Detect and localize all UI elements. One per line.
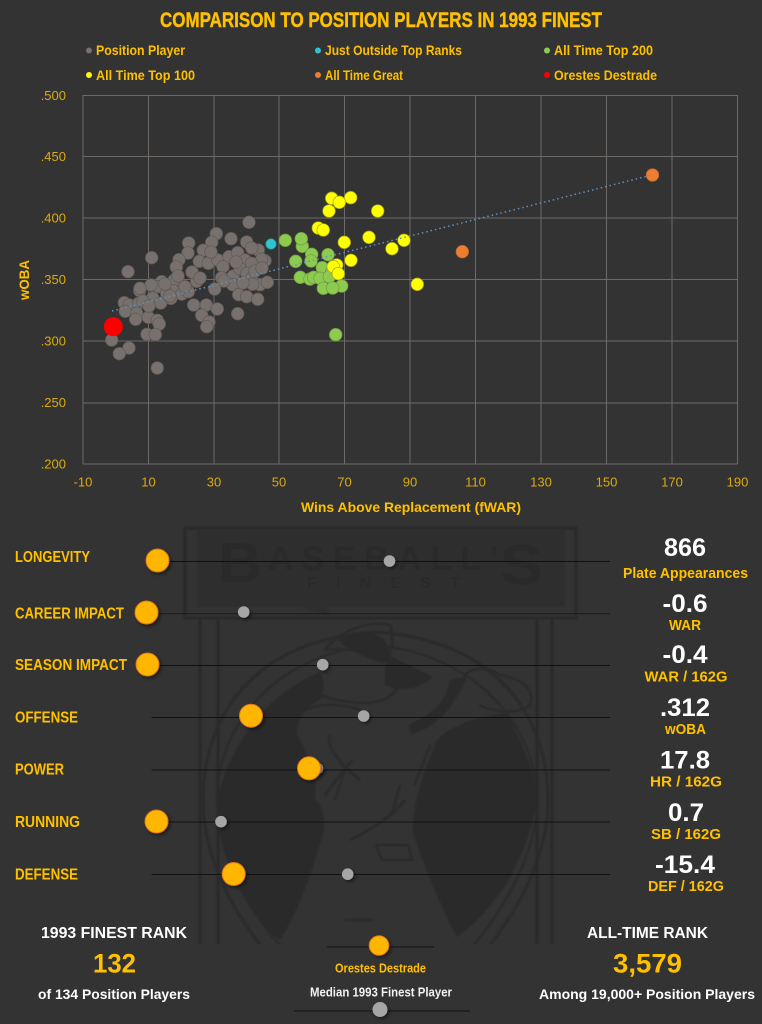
row: defense: DEFENSE — [15, 866, 78, 884]
row: season impact: -0.4 — [662, 641, 708, 669]
dark crescent left — [217, 672, 324, 940]
row: season impact: SEASON IMPACT — [15, 657, 127, 674]
legend item: all time great: All Time Great — [325, 67, 403, 83]
row: offense: OFFENSE — [15, 710, 78, 726]
watermark: Baseball's Finest card logo — [185, 528, 576, 985]
all-time rank: 3,579 — [613, 948, 682, 978]
row: longevity: LONGEVITY — [15, 549, 90, 566]
scatter chart: wOBA vs fWAR — [16, 88, 748, 515]
x axis labels: 190 — [727, 474, 748, 490]
all-time rank: Among 19,000+ Position Players — [539, 986, 755, 1002]
row: running: SB / 162G — [651, 827, 721, 843]
1993 finest rank — [38, 925, 190, 1002]
y axis labels: .300 — [41, 334, 66, 348]
row: defense: -15.4 — [655, 851, 715, 879]
y axis labels — [41, 88, 66, 472]
x axis labels: 50 — [272, 474, 286, 490]
key: median 1993 finest player marker: Median 1993 Finest Player — [310, 984, 452, 1000]
logo lettering — [218, 531, 543, 597]
y axis title: wOBA — [16, 260, 32, 301]
logo lettering: B — [218, 531, 262, 595]
row: season impact — [15, 641, 728, 686]
all-time rank — [539, 925, 755, 1002]
x axis title: Wins Above Replacement (fWAR) — [301, 499, 521, 515]
row: career impact — [15, 590, 708, 634]
x axis labels: 130 — [530, 474, 552, 490]
row: power — [15, 746, 722, 790]
logo lettering: S — [500, 533, 543, 597]
row: running: RUNNING — [15, 814, 80, 831]
red point: Orestes Destrade — [104, 317, 123, 336]
x axis labels: 90 — [403, 474, 417, 490]
row: longevity — [15, 534, 748, 582]
x axis labels: 30 — [207, 474, 221, 490]
green points: all time top 200 — [279, 232, 348, 341]
row: career impact: CAREER IMPACT — [15, 606, 124, 622]
legend item: position player: Position Player — [96, 42, 185, 58]
x axis labels: 170 — [661, 474, 683, 490]
x axis labels — [74, 474, 748, 490]
key: median 1993 finest player marker — [294, 984, 470, 1017]
trend line — [112, 176, 650, 311]
y axis labels: .200 — [41, 456, 66, 472]
y axis labels: .500 — [41, 88, 66, 103]
row: longevity: 866 — [664, 534, 706, 562]
dark cap — [340, 634, 388, 661]
legend item: all time top 200: All Time Top 200 — [554, 42, 653, 58]
dark crescent right — [413, 713, 537, 937]
legend — [86, 42, 657, 83]
key: Orestes Destrade marker: Orestes Destrade — [335, 960, 426, 976]
y axis labels: .350 — [41, 272, 66, 287]
row: power: 17.8 — [660, 746, 710, 774]
cyan point: just outside top ranks — [266, 239, 276, 249]
row: power: POWER — [15, 762, 64, 778]
row: offense: wOBA — [664, 722, 706, 738]
row: offense: .312 — [660, 694, 710, 722]
title: COMPARISON TO POSITION PLAYERS IN 1993 FINEST — [160, 9, 602, 32]
legend item: orestes destrade: Orestes Destrade — [554, 67, 657, 83]
legend item: just outside top ranks: Just Outside Top Ranks — [325, 42, 462, 58]
row: offense — [15, 694, 710, 738]
1993 finest rank: 1993 FINEST RANK — [41, 925, 187, 942]
legend item: all time top 100: All Time Top 100 — [96, 67, 195, 83]
key: Orestes Destrade marker — [327, 936, 434, 976]
logo lettering: FINEST — [307, 575, 460, 592]
logo panel — [539, 554, 540, 555]
row: defense — [15, 851, 724, 895]
row: career impact: WAR — [669, 618, 701, 634]
row: power: HR / 162G — [650, 774, 722, 790]
x axis labels: -10 — [74, 474, 92, 490]
row: longevity: Plate Appearances — [623, 566, 748, 582]
row: defense: DEF / 162G — [648, 879, 724, 895]
x axis labels: 110 — [465, 474, 486, 490]
x axis labels: 150 — [596, 474, 617, 490]
row: career impact: -0.6 — [662, 590, 708, 618]
y axis labels: .250 — [41, 395, 66, 410]
x axis labels: 10 — [141, 474, 156, 490]
row: season impact: WAR / 162G — [644, 670, 728, 686]
rating rows — [15, 534, 748, 895]
1993 finest rank: 132 — [93, 948, 136, 978]
logo lettering: ASEBALL' — [268, 540, 498, 578]
y axis labels: .400 — [41, 210, 66, 226]
all-time rank: ALL-TIME RANK — [587, 925, 708, 942]
y axis labels: .450 — [41, 149, 66, 164]
orange points: all time great — [456, 169, 659, 258]
yellow points: all time top 100 — [312, 191, 424, 291]
x axis labels: 70 — [337, 474, 352, 490]
1993 finest rank: of 134 Position Players — [38, 986, 190, 1002]
row: running — [15, 799, 721, 843]
row: running: 0.7 — [668, 799, 704, 827]
grey points: position players — [105, 216, 274, 374]
